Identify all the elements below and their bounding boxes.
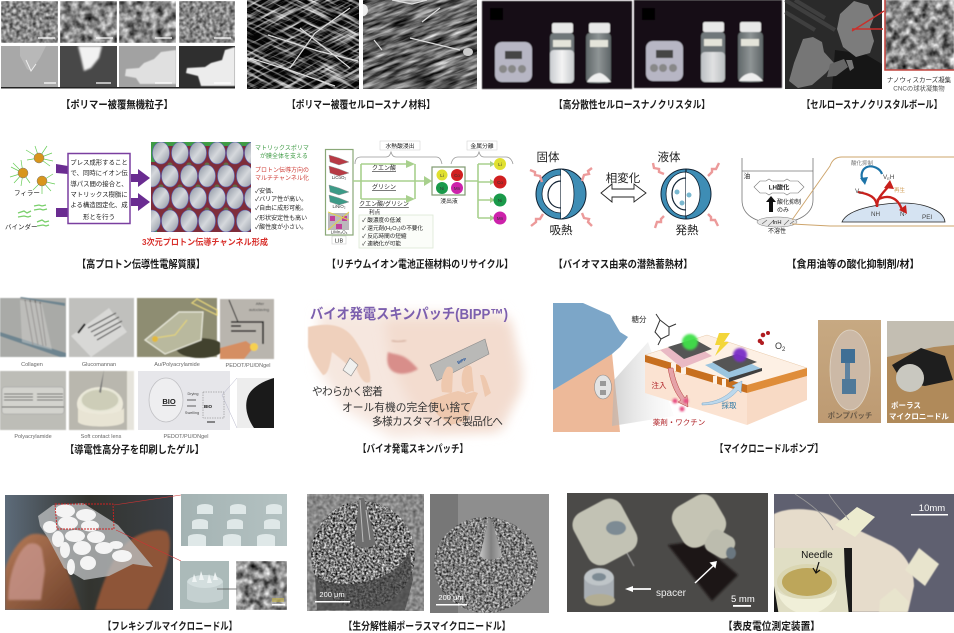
glove photo: 10mm	[919, 503, 945, 514]
BIO gel photo	[138, 371, 230, 430]
process text box: で、同時にイオン伝	[70, 168, 128, 177]
patch on fingers photo	[5, 495, 173, 610]
label: 【バイオマス由来の潜熱蓄熱材】	[554, 258, 692, 270]
reaction labels	[851, 159, 932, 221]
needle inset photo: Needle	[801, 550, 833, 561]
advantages box: ✓ 還元剤(H₂O₂)の不要化	[362, 224, 423, 232]
label: 【表皮電位測定装置】	[723, 620, 820, 632]
regeneration arrows	[858, 166, 907, 214]
reaction labels: H	[890, 174, 895, 181]
filler particles	[10, 146, 55, 194]
step brackets	[355, 152, 513, 164]
label: 【リチウムイオン電池正極材料のリサイクル】	[327, 258, 513, 270]
glove photo	[774, 494, 954, 612]
advantages box: ✓ 反応時間の短縮	[362, 232, 407, 240]
side notes	[255, 144, 309, 231]
absorb label: 吸熱	[550, 224, 573, 237]
panel: skin potential measurement device	[567, 489, 954, 632]
reaction labels: E	[859, 190, 862, 195]
panel: bio power skin patch	[308, 305, 523, 455]
solid state sphere	[536, 169, 586, 219]
advantages box: ✓ 連続化が可能	[362, 240, 401, 248]
leachate label: 浸出液	[440, 197, 458, 205]
insoluble InH	[757, 217, 797, 235]
advantages box	[359, 208, 433, 248]
reaction labels: NH	[871, 211, 881, 218]
route labels: グリシン	[372, 183, 396, 191]
route labels: クエン酸/グリシン	[359, 200, 409, 208]
spacer photo	[567, 489, 768, 612]
drug particles	[672, 398, 688, 412]
exotherm label: 発熱	[676, 223, 699, 237]
panel: edible oil antioxidant	[742, 157, 954, 270]
route labels: クエン酸	[372, 164, 396, 172]
drug label: 薬剤・ワクチン	[653, 417, 705, 427]
PEDOT LED photo: After	[256, 301, 265, 306]
SEM image 1	[307, 494, 424, 611]
side notes: マルチチャンネル化	[255, 174, 309, 182]
vial photo: before	[482, 1, 632, 89]
panel: cellulose nanocrystal ball	[785, 0, 954, 111]
O2 label: O	[775, 341, 782, 351]
leachate box with metals: Co	[454, 173, 460, 178]
oil label: 油	[744, 171, 750, 180]
single needle inset	[180, 561, 237, 609]
process text box: よる構造固定化、成	[70, 200, 128, 209]
reaction labels: E	[887, 176, 890, 181]
phase change label: 相変化	[606, 172, 641, 185]
step labels	[380, 141, 420, 150]
black cross-section photo	[222, 378, 274, 428]
glucose molecule	[655, 314, 676, 345]
process text box: 形とを行う	[83, 212, 115, 221]
Au caption: Au/Polyacrylamide	[154, 362, 200, 368]
SEM inset	[885, 0, 954, 70]
glucomannan photo	[69, 298, 134, 357]
leachate box with metals: Li	[440, 173, 444, 178]
glucomannan caption: Glucomannan	[82, 362, 116, 368]
panel: flexible microneedle	[5, 494, 287, 632]
O2 label: 2	[782, 347, 786, 353]
arm illustration	[553, 303, 628, 432]
label: 【ポリマー被覆セルロースナノ材料】	[287, 98, 435, 111]
label: 【高プロトン伝導性電解質膜】	[77, 258, 205, 270]
PEDOT caption: PEDOT/PU/DNgel	[226, 363, 270, 369]
lightning	[715, 333, 730, 356]
inject arrow	[668, 368, 688, 407]
glucose label: 糖分	[632, 314, 647, 324]
porous microneedle photo: ポーラス	[891, 401, 921, 410]
beaker	[742, 158, 813, 223]
liquid label: 液体	[658, 150, 681, 164]
SEM image 2: 200 μm	[438, 593, 464, 602]
fibre SEM photo 2	[363, 0, 477, 89]
lens caption: Soft contact lens	[81, 434, 122, 440]
advantages box: 利点	[369, 208, 381, 216]
feature text: オール有機の完全使い捨て	[342, 401, 471, 414]
inhibition text	[777, 198, 801, 214]
reaction labels: V	[883, 174, 887, 181]
insoluble InH: InH	[772, 220, 782, 226]
SEM photo grid	[1, 1, 235, 88]
label: 【高分散性セルロースナノクリスタル】	[554, 98, 710, 111]
inset caption: ナノウィスカーズ凝集	[887, 75, 952, 84]
panel: high proton conductive membrane	[5, 142, 309, 270]
reaction labels: V	[855, 188, 859, 195]
process flow arrows	[353, 164, 493, 218]
process text box: 導パス間の接合と、	[70, 179, 128, 188]
pump patch photo	[818, 320, 881, 423]
binder squiggles	[18, 205, 49, 226]
SEM image 2	[430, 494, 549, 613]
callout zoom outline	[792, 157, 954, 226]
step labels	[467, 141, 497, 150]
inhibition text: 酸化抑制	[777, 198, 801, 206]
skin block	[645, 335, 807, 425]
label: 【食用油等の酸化抑制剤/材】	[786, 258, 920, 270]
SEM image 1: 200 μm	[319, 590, 345, 599]
label: 【フレキシブルマイクロニードル】	[103, 620, 237, 632]
up arrow	[766, 196, 776, 212]
side notes: プロトン伝導方向の	[255, 166, 309, 174]
reaction labels: 酸化抑制	[851, 159, 874, 167]
LH oxidation burst	[754, 179, 804, 195]
pump patch photo: ポンプパッチ	[828, 411, 872, 420]
LIB label: LIB	[335, 238, 343, 244]
vial photo: after	[634, 0, 782, 88]
LIB crystal box	[326, 150, 353, 235]
collagen photo	[0, 297, 66, 357]
process text box: プレス成形すること	[70, 158, 128, 166]
fibre SEM photo 1	[247, 0, 359, 89]
binder label: バインダー	[5, 222, 38, 231]
arrow heads	[406, 160, 495, 221]
solid label: 固体	[536, 150, 560, 164]
collect label: 採取	[722, 400, 737, 410]
collagen caption: Collagen	[21, 362, 43, 368]
process text box	[68, 154, 130, 224]
panel: polymer-coated cellulose nanomaterial	[247, 0, 477, 110]
needle inset photo	[774, 548, 852, 616]
reaction labels: ·	[862, 188, 864, 195]
feature text: やわらかく密着	[312, 385, 383, 398]
zoom lines	[114, 495, 181, 561]
leachate box with metals: Ni	[440, 186, 444, 191]
LIB crystal box: LiCoO₂	[332, 175, 346, 180]
side notes: ✓安価、	[255, 187, 277, 195]
liquid state sphere	[661, 169, 711, 219]
released heat arrows	[653, 163, 719, 228]
projection beam	[612, 342, 674, 426]
side notes: ✓バリア性が高い。	[255, 195, 307, 203]
LIB crystal box: LiNiO₂	[332, 204, 346, 209]
LH oxidation burst: LH酸化	[769, 184, 790, 192]
SEM overview	[785, 0, 884, 89]
label: 【導電性高分子を印刷したゲル】	[65, 443, 204, 456]
reaction labels: 再生	[894, 186, 906, 194]
feature text	[312, 385, 503, 428]
PEI surface	[842, 203, 945, 222]
channel structure image	[151, 142, 251, 232]
side notes: ✓形状安定性も高い	[255, 214, 307, 222]
BIO gel photo: BIO	[162, 397, 176, 406]
panel: microneedle pump	[553, 303, 954, 455]
label: 【マイクロニードルポンプ】	[715, 443, 823, 455]
panel: printed conductive polymer gel	[0, 297, 274, 456]
LIB label	[332, 236, 346, 244]
spacer photo: spacer	[656, 588, 687, 599]
double arrow	[601, 184, 646, 202]
label: 【バイオ発電スキンパッチ】	[358, 442, 468, 455]
panel: polymer-coated inorganic particles	[1, 1, 235, 111]
soft contact lens photo	[69, 370, 134, 430]
arrows out of process box	[131, 169, 150, 211]
enzymes	[682, 334, 747, 362]
advantages box: ✓ 酸濃度の低減	[362, 216, 401, 224]
panel: lithium ion battery cathode recycling	[326, 141, 513, 270]
feature text: 多様カスタマイズで製品化へ	[372, 415, 503, 428]
red caption: 3次元プロトン伝導チャンネル形成	[142, 237, 268, 247]
reaction labels: N·	[900, 211, 907, 218]
polyacrylamide caption: Polyacrylamide	[14, 434, 52, 440]
filler label: フィラー	[14, 189, 40, 197]
inset caption: CNCの球状凝集物	[893, 84, 945, 92]
Au polyacrylamide photo	[137, 298, 224, 358]
LIB crystal box: LiMn₂O₄	[331, 230, 348, 234]
PEDOT LED photo	[220, 299, 274, 359]
oxygen molecules	[758, 331, 770, 345]
leachate box with metals	[432, 167, 465, 195]
panel: highly dispersible cellulose nanocrystals	[482, 0, 782, 111]
insoluble InH: 不溶性	[768, 227, 786, 235]
PEDOT caption: PEDOT/PU/DNgel	[164, 434, 208, 440]
BIO gel photo: Swelling	[185, 411, 199, 415]
side notes: マトリックスポリマ	[255, 144, 309, 152]
panel: biomass latent heat storage	[530, 150, 719, 270]
BIO gel photo: BIO	[204, 404, 212, 409]
separated metals	[494, 158, 506, 224]
separated metals: Mn	[497, 216, 504, 221]
patch in fingers	[430, 339, 491, 425]
side notes: ✓酸性度が小さい。	[255, 223, 307, 231]
patch in fingers: BIPP	[456, 356, 467, 365]
side notes: ✓自由に成形可能。	[255, 204, 307, 212]
absorbed heat arrows	[530, 168, 592, 226]
arrows into process box	[56, 164, 68, 217]
polyacrylamide photo	[0, 371, 66, 430]
PEDOT LED photo: autoclaving	[249, 307, 269, 312]
patch electrodes	[660, 339, 762, 382]
label: 【ポリマー被覆無機粒子】	[61, 98, 173, 111]
separated metals: Li	[498, 162, 502, 167]
process text box: マトリックス樹脂に	[70, 190, 128, 198]
step labels: 金属分離	[470, 142, 494, 150]
inject label: 注入	[652, 380, 667, 390]
BIO gel photo: Drying	[188, 392, 198, 396]
patch title: バイオ発電スキンパッチ(BIPP™)	[310, 305, 508, 323]
inhibition text: のみ	[777, 207, 789, 214]
side notes: が膜全体を支える	[260, 152, 308, 160]
separated metals: Ni	[498, 198, 502, 203]
spacer photo: 5 mm	[731, 594, 755, 605]
leachate box with metals: Mn	[454, 186, 461, 191]
collect arrow	[702, 381, 742, 405]
porous microneedle photo	[887, 321, 954, 423]
route labels	[359, 164, 409, 208]
step labels: 水熱酸浸出	[386, 142, 415, 150]
reaction labels: PEI	[922, 214, 932, 221]
porous microneedle photo: マイクロニードル	[889, 411, 949, 421]
porous SEM inset	[236, 561, 287, 610]
label: 【生分解性絹ポーラスマイクロニードル】	[344, 620, 510, 632]
microneedle array inset	[181, 494, 287, 546]
skin illustration background	[308, 312, 523, 438]
panel: biodegradable silk porous microneedle	[307, 494, 549, 632]
separated metals: Co	[497, 180, 503, 185]
